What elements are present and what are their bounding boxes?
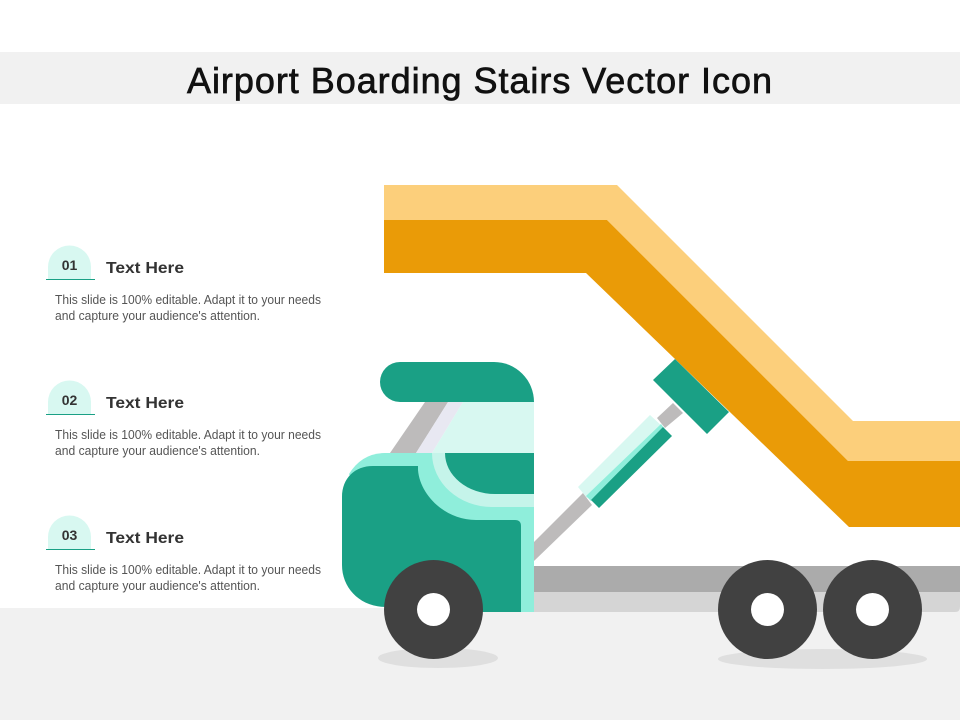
boarding stairs <box>384 185 960 527</box>
list item 01 <box>46 246 321 323</box>
truck cab <box>342 453 534 612</box>
heading 01: Text Here <box>106 260 184 277</box>
heading 03: Text Here <box>106 530 184 547</box>
rear wheel 2 <box>823 560 922 659</box>
hydraulic lift arm <box>534 359 729 561</box>
truck chassis <box>534 566 960 612</box>
title: Airport Boarding Stairs Vector Icon <box>187 60 772 101</box>
badge 01: 01 <box>62 257 77 273</box>
list item 03 <box>46 516 321 593</box>
body text 01: This slide is 100% editable. Adapt it to your needs <box>55 292 321 307</box>
front wheel <box>384 560 483 659</box>
heading 02: Text Here <box>106 395 184 412</box>
badge 03: 03 <box>62 527 77 543</box>
body text 02: This slide is 100% editable. Adapt it to your needs <box>55 427 321 442</box>
body text 03: This slide is 100% editable. Adapt it to your needs <box>55 562 321 577</box>
badge 03 <box>46 516 95 550</box>
wheel shadows <box>378 648 927 669</box>
rear wheel 1 <box>718 560 817 659</box>
truck with boarding stairs <box>342 185 960 669</box>
badge 01 <box>46 246 95 280</box>
list item 02 <box>46 380 321 458</box>
cab window and roof <box>380 362 534 453</box>
badge 02 <box>46 380 95 415</box>
body text 01: and capture your audience's attention. <box>55 308 260 323</box>
body text 03: and capture your audience's attention. <box>55 578 260 593</box>
badge 02: 02 <box>62 392 77 408</box>
body text 02: and capture your audience's attention. <box>55 443 260 458</box>
title band <box>0 52 960 104</box>
